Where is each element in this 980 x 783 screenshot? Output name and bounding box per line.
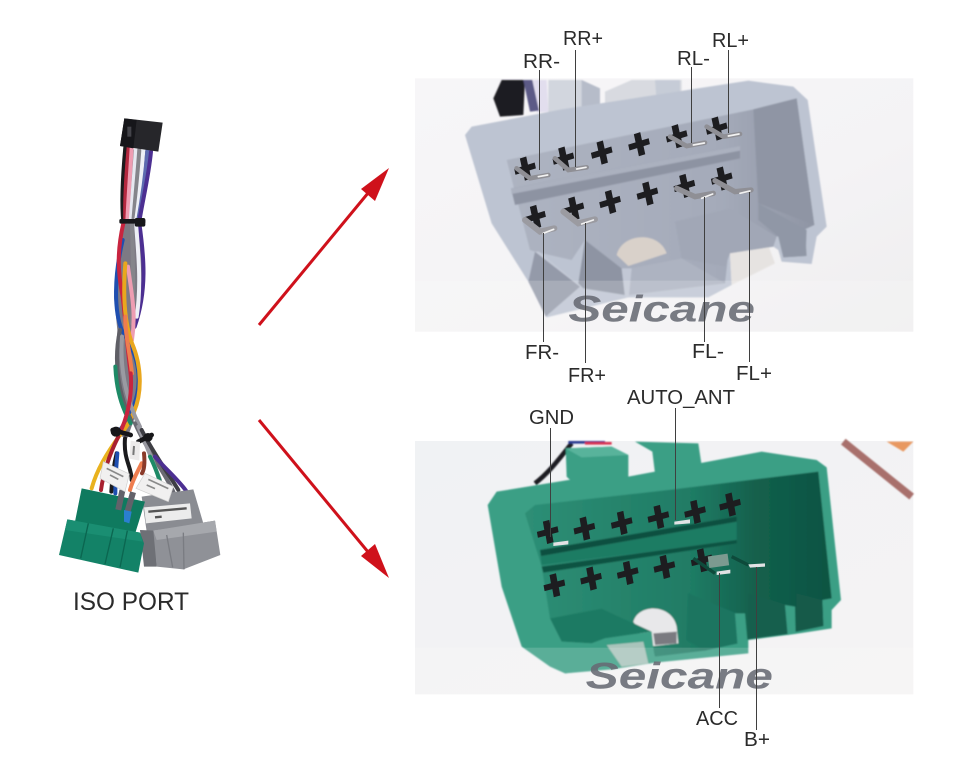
white label tags bbox=[100, 462, 173, 502]
panel: green power connector photo bbox=[415, 441, 913, 696]
connector inner face bbox=[525, 472, 832, 657]
green connector body bbox=[488, 442, 913, 673]
round opening bbox=[633, 608, 678, 647]
pin labels: B+ bbox=[744, 729, 770, 751]
lower right tabs bbox=[687, 593, 738, 651]
metal pins bbox=[517, 127, 751, 233]
wires: twisted middle bundle bbox=[115, 223, 144, 435]
lower left tabs bbox=[528, 252, 580, 317]
wires: upper bundle bbox=[122, 147, 151, 222]
terminal slots bbox=[512, 115, 735, 231]
raised right tab bbox=[675, 208, 777, 267]
metal pins bbox=[553, 519, 765, 575]
lower left tab bbox=[550, 608, 652, 643]
right shelf bbox=[758, 203, 807, 257]
pin rail bbox=[540, 517, 737, 565]
pin labels: RR+ bbox=[563, 28, 603, 50]
notch showing background bbox=[730, 247, 775, 285]
pin labels: FL+ bbox=[736, 363, 772, 385]
inner right wall bbox=[753, 98, 814, 225]
wires: lower fan-out bbox=[92, 423, 186, 493]
connector inner face bbox=[507, 98, 814, 292]
pin labels bbox=[523, 28, 772, 751]
cable ties lower bbox=[111, 427, 153, 442]
arrow: to gray connector bbox=[259, 168, 389, 325]
photo background bbox=[415, 78, 913, 332]
caption: ISO PORT: ISO PORT bbox=[73, 588, 189, 616]
divider rail bbox=[511, 146, 740, 205]
pin labels: FL- bbox=[692, 341, 724, 363]
bundle backing bbox=[114, 148, 152, 438]
gray connector body bbox=[465, 80, 827, 317]
panel: gray speaker connector photo bbox=[415, 78, 913, 332]
pin callout lines bbox=[540, 50, 756, 730]
green connector bbox=[59, 488, 145, 573]
pin labels: RL- bbox=[677, 48, 710, 70]
pin labels: FR- bbox=[525, 342, 559, 364]
small wire tag bbox=[129, 441, 140, 461]
pin labels: RR- bbox=[523, 51, 560, 73]
panel: ISO harness photo bbox=[59, 118, 220, 573]
pin labels: ACC bbox=[696, 708, 738, 730]
wires behind connector bbox=[493, 80, 548, 117]
pin labels: AUTO_ANT bbox=[627, 387, 735, 409]
photo background bbox=[415, 441, 913, 694]
watermark: Seicane bbox=[586, 654, 773, 696]
terminal slots bbox=[535, 491, 743, 599]
pin labels: GND bbox=[529, 407, 574, 429]
watermark: Seicane bbox=[568, 288, 755, 330]
pin labels: FR+ bbox=[568, 365, 606, 387]
black multi-pin plug bbox=[120, 118, 163, 152]
pin labels: RL+ bbox=[712, 30, 749, 52]
round opening bbox=[617, 237, 667, 266]
background wires bbox=[535, 442, 913, 497]
rear tabs bbox=[566, 442, 702, 485]
connector rear tabs bbox=[548, 80, 682, 120]
arrow: to green connector bbox=[259, 420, 389, 578]
gray connector bbox=[140, 489, 220, 569]
connector outer shell bbox=[488, 452, 841, 673]
translucent band behind watermark bbox=[415, 648, 913, 694]
translucent band behind watermark bbox=[415, 281, 913, 332]
cable tie upper bbox=[119, 218, 145, 227]
connector outer shell bbox=[465, 81, 827, 317]
